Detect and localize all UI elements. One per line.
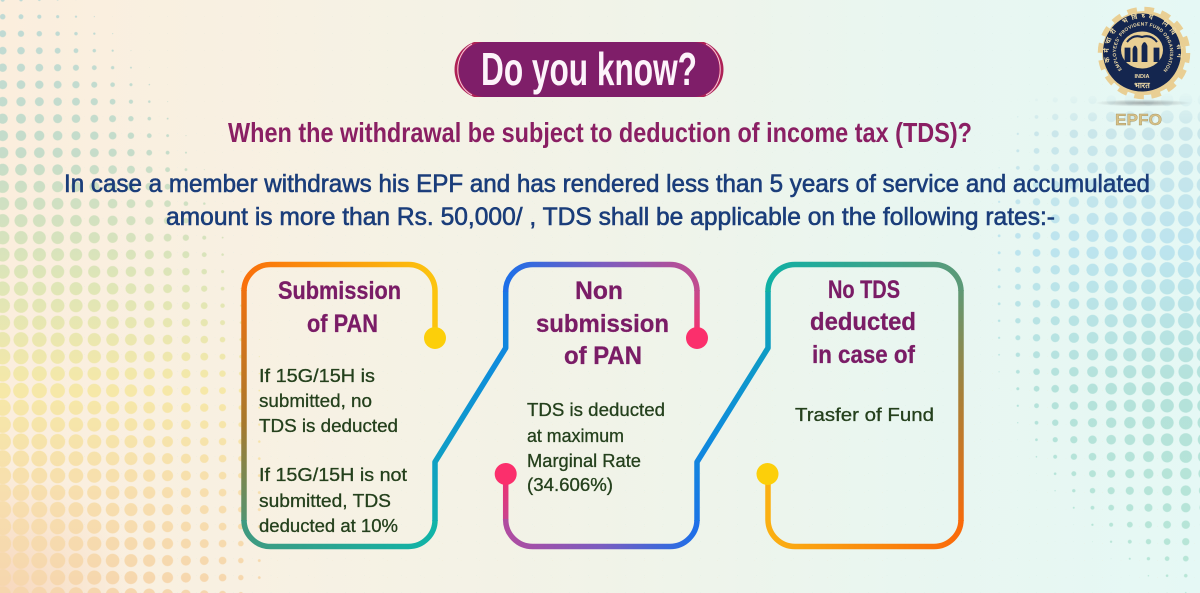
panel heading: No TDS <box>828 276 900 304</box>
panel: submission of PAN <box>259 277 407 536</box>
body: 15G/15H not submitted: submitted, TDS <box>259 490 391 511</box>
panel heading: submission <box>536 310 669 338</box>
EPFO label: EPFO <box>1115 112 1162 129</box>
logo shadow <box>1095 100 1191 106</box>
body: marginal rate: at maximum <box>527 425 624 446</box>
body: 15G/15H not submitted <box>259 464 407 536</box>
panel heading: in case of <box>812 341 916 369</box>
title badge: Do you know?: Do you know? <box>481 43 697 95</box>
icon: EPFO logo <box>1098 6 1190 129</box>
panel heading: of PAN <box>307 310 378 338</box>
heading question: When the withdrawal be subject to deduction of income tax (TDS)? <box>228 117 972 148</box>
body: 15G/15H not submitted: deducted at 10% <box>259 515 398 536</box>
centre emblem <box>1121 32 1163 68</box>
gear <box>1101 10 1187 96</box>
panel heading: Submission <box>278 277 401 305</box>
body: marginal rate: Marginal Rate <box>527 450 641 471</box>
panel heading: Non <box>575 277 623 305</box>
panel: non submission of PAN <box>527 277 669 495</box>
panel heading <box>536 277 669 370</box>
body: transfer of fund: Trasfer of Fund <box>795 404 934 425</box>
body: 15G/15H submitted: If 15G/15H is <box>259 365 375 386</box>
intro text <box>64 170 1150 231</box>
connector dot: panel 2 bottom <box>495 463 517 485</box>
body: 15G/15H submitted: submitted, no <box>259 390 372 411</box>
connector dot: panel 2 top <box>686 327 708 349</box>
body: marginal rate: TDS is deducted <box>527 399 665 420</box>
panel heading: deducted <box>810 308 916 336</box>
body: 15G/15H submitted: TDS is deducted <box>259 415 398 436</box>
INDIA label: INDIA <box>1135 74 1150 80</box>
connecting flow line frame <box>244 264 961 546</box>
connector dot: panel 3 <box>756 463 778 485</box>
panel heading <box>810 276 916 369</box>
panel heading: of PAN <box>564 342 642 370</box>
panel: no TDS deducted <box>795 276 934 425</box>
ring text: EMPLOYEES' PROVIDENT FUND ORGANISATION <box>1112 22 1174 72</box>
title badge: Do you know? <box>454 42 724 97</box>
body: 15G/15H submitted <box>259 365 398 436</box>
body: marginal rate: (34.606%) <box>527 474 613 495</box>
ring text <box>1102 13 1183 72</box>
intro text: amount is more than Rs. 50,000/ , TDS shall be applicable on the following rates:- <box>166 203 1055 231</box>
panel heading <box>278 277 401 338</box>
intro text: In case a member withdraws his EPF and has rendered less than 5 years of service and accumulated <box>64 170 1150 198</box>
connector dot: panel 1 <box>424 327 446 349</box>
navy ring <box>1103 14 1181 92</box>
Hindi label: Bharat: भारत <box>1134 81 1150 90</box>
body: 15G/15H not submitted: If 15G/15H is not <box>259 464 407 485</box>
body: marginal rate <box>527 399 665 495</box>
